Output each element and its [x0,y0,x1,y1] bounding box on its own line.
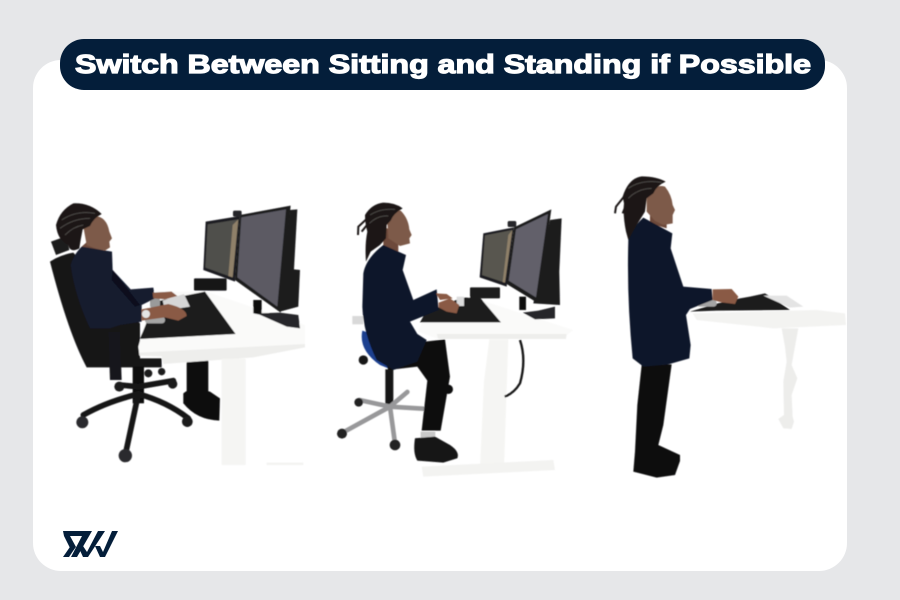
lower leg and foot [183,358,220,421]
mat, keyboard and dock [140,278,236,339]
photo: seated in office chair at low desk [50,203,305,465]
monitors [480,209,562,319]
stool [337,316,423,450]
person: standing [615,176,738,478]
photo: standing at raised desk [615,176,846,478]
title: Switch Between Sitting and Standing if Possible [75,49,811,79]
panel: white card [33,60,847,571]
monitors [203,206,300,328]
chair [50,236,193,462]
logo [63,531,118,557]
photo: seated on stool at raised desk [337,203,573,477]
faded desk [693,310,846,429]
person: seated [56,203,187,328]
desk [418,297,573,477]
desk [138,292,305,465]
mat and keyboard [690,293,803,312]
title pill [60,39,825,90]
mat and dock [420,287,501,322]
legs and shoe [380,339,458,463]
person: perched [358,203,459,370]
